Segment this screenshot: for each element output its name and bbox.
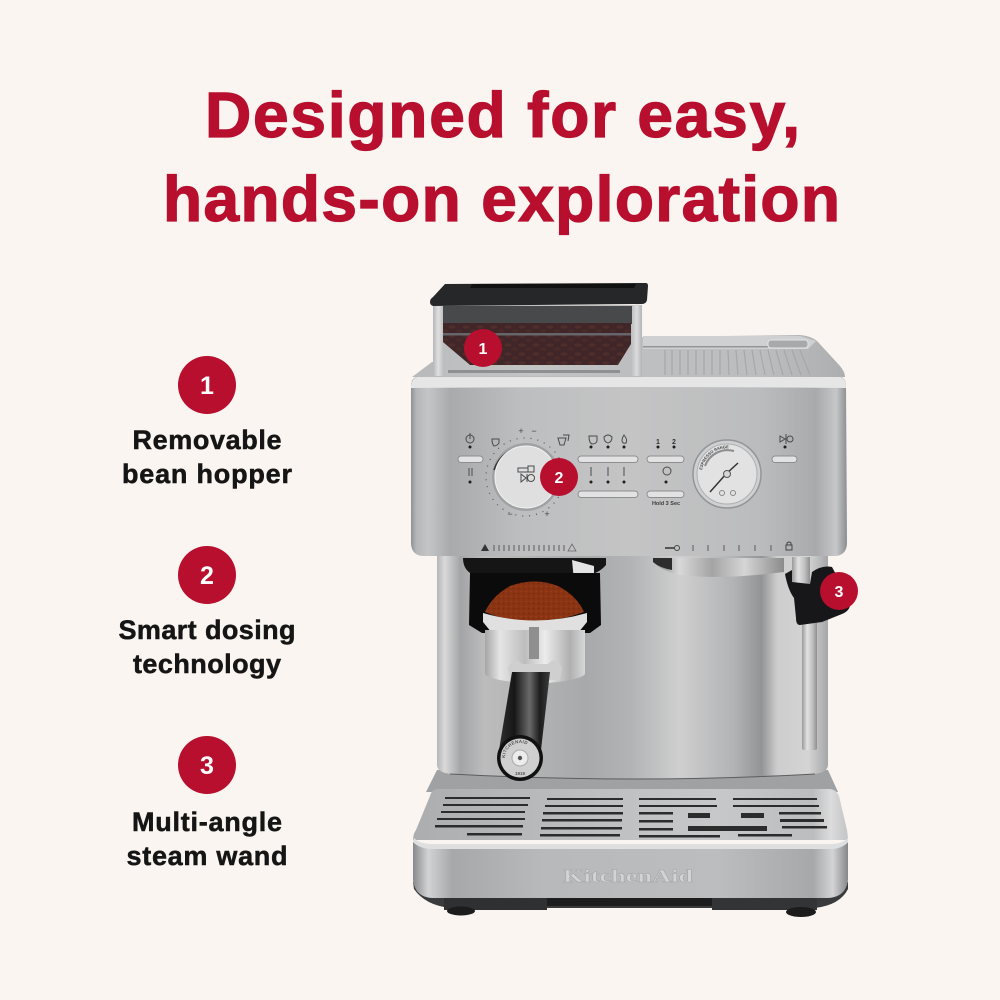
label 3: [126, 807, 288, 871]
feature 1: removable bean hopper: [122, 356, 292, 489]
callout badge 2: [540, 458, 578, 496]
handle end cap: KITCHENAID: [502, 740, 528, 758]
portafilter and ground coffee: [463, 558, 606, 781]
hopper lid: [430, 283, 648, 306]
feature 2: smart dosing technology: [118, 546, 296, 679]
pressure gauge: ESPRESSO RANGE: [699, 446, 729, 470]
panel icons: [466, 433, 793, 507]
label 3: Multi-angle: [132, 807, 282, 837]
callout badge 1: 1: [479, 341, 488, 358]
label 1: [122, 425, 292, 489]
cup warming tray: [640, 335, 845, 377]
panel icons: 1: [656, 439, 660, 446]
upper body and control panel: [411, 377, 847, 556]
label 1: bean hopper: [122, 459, 292, 489]
panel icons: Hold 3 Sec: [652, 501, 680, 507]
machine feet and underside: [413, 882, 848, 917]
number badge 2: [178, 546, 236, 604]
handle end cap: [497, 735, 543, 781]
grind size scale: [481, 544, 576, 551]
title: Designed for easy,: [205, 79, 800, 151]
panel icons: 2: [672, 439, 676, 446]
title: [163, 79, 840, 235]
steam ring under group head: [653, 558, 784, 577]
portafilter handle: [499, 672, 550, 750]
number badge 2: 2: [200, 562, 214, 590]
label 3: steam wand: [126, 841, 288, 871]
steam wand grip: [785, 567, 850, 625]
callout badge 1: [464, 329, 502, 367]
number badge 1: 1: [200, 372, 214, 400]
label 2: [118, 615, 296, 679]
pressure gauge: [692, 439, 762, 509]
label 1: Removable: [132, 425, 282, 455]
drip tray front: [413, 838, 848, 898]
number badge 1: [178, 356, 236, 414]
dose dial: +: [544, 509, 550, 519]
dose dial: −: [507, 509, 513, 519]
bean hopper: [412, 283, 648, 377]
steam position scale: [665, 542, 792, 551]
steam wand: [785, 557, 850, 750]
grinder collar: [463, 558, 606, 633]
portafilter basket: [483, 613, 587, 684]
handle end cap: 1919: [515, 771, 526, 776]
hopper container: [433, 305, 642, 376]
label 2: technology: [133, 649, 281, 679]
dose dial: [486, 426, 564, 519]
callout badge 3: [820, 572, 858, 610]
coffee grounds: [485, 582, 584, 621]
feature 3: multi-angle steam wand: [126, 736, 288, 871]
panel buttons: [458, 456, 797, 498]
espresso machine: [411, 283, 858, 917]
brand logo: KitchenAid: [563, 866, 693, 886]
coffee beans: [443, 323, 631, 365]
number badge 3: [178, 736, 236, 794]
dose dial: +: [518, 426, 524, 436]
indicator dots: [468, 446, 786, 484]
number badge 3: 3: [200, 752, 214, 780]
label 2: Smart dosing: [118, 615, 296, 645]
dose dial: −: [531, 426, 537, 436]
callout badge 2: 2: [555, 470, 564, 487]
drip tray: [413, 770, 848, 840]
lower body: [437, 550, 828, 779]
callout badge 3: 3: [835, 584, 844, 601]
grille slots: [435, 797, 827, 838]
title: hands-on exploration: [163, 163, 840, 235]
